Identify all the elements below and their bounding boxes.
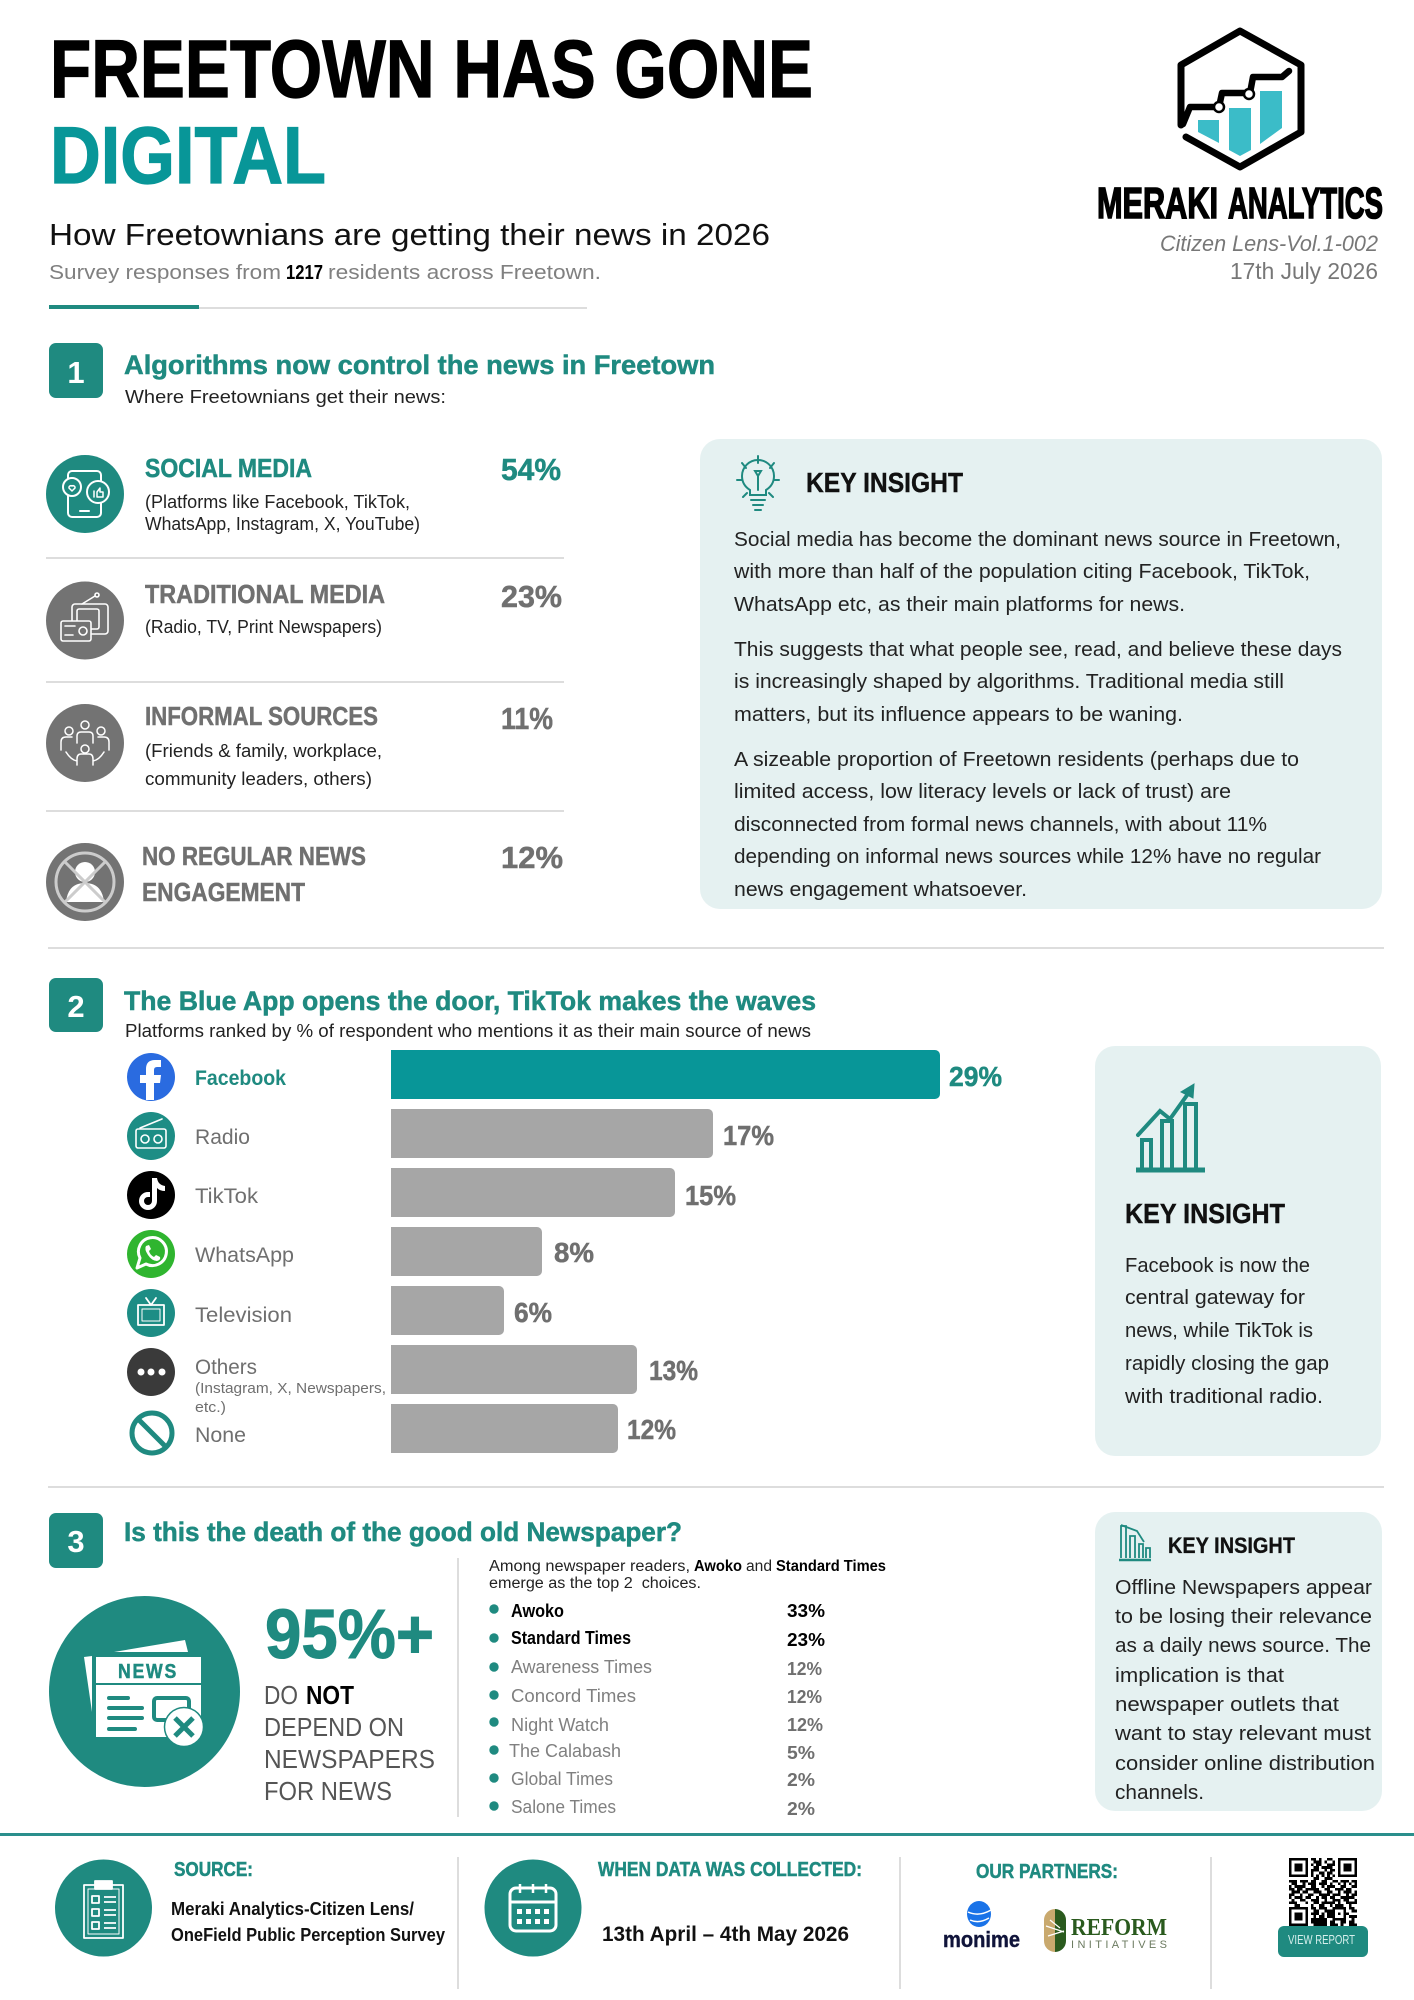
section 2 heading: The Blue App opens the door, TikTok makes the waves <box>124 986 816 1016</box>
no regular news row: NO REGULAR NEWS <box>142 841 366 871</box>
bar values: 6% <box>514 1297 552 1328</box>
bar values <box>514 1061 1002 1445</box>
platform labels: Radio <box>195 1126 250 1149</box>
platform labels <box>195 1067 386 1447</box>
footer: data collection dates <box>484 1859 862 1956</box>
newspaper ranking list: Awareness Times <box>511 1657 652 1677</box>
informal sources row <box>46 701 553 789</box>
footer: partners <box>943 1861 1167 1952</box>
platform labels: Facebook <box>195 1067 286 1090</box>
report volume and date <box>1160 231 1378 284</box>
social media row: SOCIAL MEDIA <box>145 453 312 483</box>
traditional media row: 23% <box>501 579 562 614</box>
insight body text <box>1114 1577 1375 1804</box>
newspaper ranking list: 5% <box>787 1743 815 1763</box>
title: FREETOWN HAS GONE <box>50 24 813 115</box>
icon: light bulb <box>737 456 779 510</box>
footer: source: SOURCE: <box>174 1859 253 1881</box>
platform labels: (Instagram, X, Newspapers, <box>195 1380 386 1397</box>
newspaper ranking list: The Calabash <box>509 1741 621 1761</box>
insight body text: depending on informal news sources while 12% have no regular <box>734 846 1321 868</box>
newspaper ranking list: Standard Times <box>511 1628 631 1648</box>
insight body text: disconnected from formal news channels, with about 11% <box>734 814 1267 836</box>
section 1 heading: Where Freetownians get their news: <box>125 387 446 407</box>
no regular news row <box>46 840 563 921</box>
icon: newspaper with cross: NEWS <box>118 1661 178 1683</box>
icon: clipboard checklist <box>84 1881 123 1938</box>
insight body text: with traditional radio. <box>1124 1386 1323 1408</box>
newspaper ranking list: 2% <box>787 1770 815 1790</box>
bars <box>391 1050 940 1453</box>
insight body text: Social media has become the dominant news source in Freetown, <box>734 529 1341 551</box>
social media row: WhatsApp, Instagram, X, YouTube) <box>145 514 420 534</box>
newspaper intro text: and <box>746 1558 772 1575</box>
icon: facebook <box>127 1053 175 1101</box>
button: view report <box>1278 1926 1368 1957</box>
button: view report: VIEW REPORT <box>1288 1933 1355 1947</box>
panel: key insight 1: KEY INSIGHT <box>806 467 963 498</box>
panel: key insight 3 <box>1095 1512 1382 1811</box>
platform labels: None <box>195 1424 246 1447</box>
insight body text: channels. <box>1115 1782 1204 1804</box>
bar values: 17% <box>723 1120 774 1151</box>
panel: key insight 2: KEY INSIGHT <box>1125 1198 1285 1229</box>
newspaper intro text: Among newspaper readers, <box>489 1558 690 1575</box>
insight body text: central gateway for <box>1125 1287 1305 1309</box>
section 2 heading <box>49 978 816 1041</box>
insight body text: Facebook is now the <box>1125 1255 1310 1277</box>
footer: data collection dates: 13th April – 4th May 2026 <box>602 1923 849 1946</box>
section 1 heading: 1 <box>67 355 85 390</box>
informal sources row: 11% <box>501 701 553 736</box>
stat: 95%+: NOT <box>306 1680 354 1710</box>
logo: Meraki Analytics: MERAKI <box>1097 179 1218 228</box>
newspaper ranking list: Night Watch <box>511 1715 609 1735</box>
stat: 95%+: DEPEND ON <box>264 1712 404 1742</box>
icon: tiktok <box>127 1171 175 1219</box>
insight body text: newspaper outlets that <box>1115 1694 1339 1716</box>
stat: 95%+: NEWSPAPERS <box>264 1744 435 1774</box>
bar values: 13% <box>649 1355 698 1386</box>
icon: calendar <box>510 1884 556 1931</box>
informal sources row: (Friends & family, workplace, <box>145 741 382 761</box>
insight body text: This suggests that what people see, read, and believe these days <box>734 639 1342 661</box>
newspaper ranking list: Salone Times <box>511 1797 616 1817</box>
report volume and date: 17th July 2026 <box>1230 258 1378 284</box>
stat: 95%+: 95%+ <box>265 1595 434 1673</box>
icon: group of people <box>61 721 109 765</box>
newspaper ranking list: 12% <box>787 1687 822 1707</box>
survey note: residents across Freetown. <box>328 262 601 284</box>
no regular news row: 12% <box>501 840 563 875</box>
informal sources row: community leaders, others) <box>145 769 372 789</box>
platform labels: Television <box>195 1304 292 1327</box>
icon: television <box>127 1289 175 1337</box>
section 1 heading: Algorithms now control the news in Freetown <box>124 350 715 380</box>
platform labels: WhatsApp <box>195 1244 294 1267</box>
survey note: 1217 <box>286 262 323 284</box>
bar values: 29% <box>949 1061 1002 1092</box>
footer: source <box>55 1859 445 1956</box>
traditional media row <box>46 579 562 660</box>
survey note: Survey responses from <box>49 262 281 284</box>
icon: phone with social bubbles <box>63 471 109 517</box>
insight body text: as a daily news source. The <box>1115 1635 1371 1657</box>
platform labels: Others <box>195 1356 257 1379</box>
newspaper intro text: Standard Times <box>776 1558 886 1575</box>
footer: source: OneField Public Perception Survey <box>171 1925 445 1945</box>
section 3 heading <box>49 1513 682 1568</box>
bar values: 12% <box>627 1414 676 1445</box>
section 3 heading: Is this the death of the good old Newspaper? <box>124 1517 682 1547</box>
newspaper ranking list: Global Times <box>511 1769 613 1789</box>
section 2 heading: Platforms ranked by % of respondent who mentions it as their main source of news <box>125 1021 811 1041</box>
newspaper ranking list: 23% <box>787 1630 825 1650</box>
newspaper intro text: emerge as the top 2 choices. <box>489 1575 701 1592</box>
icon: rising chart <box>1136 1084 1205 1170</box>
logo: reform initiatives: INITIATIVES <box>1071 1939 1167 1951</box>
panel: key insight 2 <box>1095 1046 1381 1456</box>
panel: news source categories <box>46 452 564 921</box>
insight body text: consider online distribution <box>1115 1753 1375 1775</box>
insight body text: news engagement whatsoever. <box>734 879 1027 901</box>
icon: crossed-out person <box>56 853 114 911</box>
insight body text: implication is that <box>1115 1665 1284 1687</box>
no regular news row: ENGAGEMENT <box>142 877 305 907</box>
insight body text: to be losing their relevance <box>1115 1606 1372 1628</box>
QR code <box>1289 1858 1357 1926</box>
subtitle: How Freetownians are getting their news in 2026 <box>49 217 770 252</box>
logo: reform initiatives: REFORM <box>1071 1915 1167 1941</box>
bar chart: platforms <box>127 1050 1002 1453</box>
section 2 heading: 2 <box>67 989 85 1024</box>
logo: Meraki Analytics <box>1097 31 1383 228</box>
newspaper ranking list <box>489 1601 825 1819</box>
traditional media row: (Radio, TV, Print Newspapers) <box>145 617 382 637</box>
section 3 heading: 3 <box>67 1524 85 1559</box>
logo: monime <box>943 1901 1020 1952</box>
newspaper intro text: Awoko <box>694 1558 742 1575</box>
icon: whatsapp <box>127 1230 175 1278</box>
panel: key insight 3: KEY INSIGHT <box>1168 1533 1295 1558</box>
footer: data collection dates: WHEN DATA WAS COLLECTED: <box>598 1859 862 1881</box>
icon: others <box>127 1348 175 1396</box>
newspaper ranking list: 12% <box>787 1659 822 1679</box>
newspaper ranking list: 33% <box>787 1601 825 1621</box>
insight body text <box>733 529 1342 901</box>
insight body text: news, while TikTok is <box>1125 1320 1313 1342</box>
stat: 95%+: DO <box>264 1680 298 1710</box>
social media row: (Platforms like Facebook, TikTok, <box>145 492 410 512</box>
icon: tv and radio <box>61 593 108 641</box>
insight body text: Offline Newspapers appear <box>1115 1577 1372 1599</box>
survey note <box>49 262 601 284</box>
platform labels: etc.) <box>195 1399 226 1416</box>
insight body text: A sizeable proportion of Freetown residents (perhaps due to <box>734 749 1299 771</box>
insight body text <box>1124 1255 1329 1408</box>
logo: reform initiatives <box>1044 1909 1167 1952</box>
insight body text: limited access, low literacy levels or lack of trust) are <box>734 781 1231 803</box>
bar values: 8% <box>554 1237 594 1268</box>
insight body text: with more than half of the population citing Facebook, TikTok, <box>733 561 1310 583</box>
newspaper ranking list: 2% <box>787 1799 815 1819</box>
section 1 heading <box>49 343 715 407</box>
stat: 95%+ <box>264 1595 435 1806</box>
insight body text: rapidly closing the gap <box>1125 1353 1329 1375</box>
panel: key insight 1 <box>700 439 1382 909</box>
insight body text: want to stay relevant must <box>1114 1723 1371 1745</box>
newspaper ranking list: Concord Times <box>511 1686 636 1706</box>
insight body text: matters, but its influence appears to be waning. <box>734 704 1183 726</box>
social media row <box>46 452 561 534</box>
insight body text: is increasingly shaped by algorithms. Traditional media still <box>734 671 1284 693</box>
report volume and date: Citizen Lens-Vol.1-002 <box>1160 231 1378 256</box>
platform labels: TikTok <box>195 1185 259 1208</box>
newspaper intro text <box>489 1558 886 1592</box>
icon: radio <box>127 1112 175 1160</box>
logo: monime: monime <box>943 1927 1020 1952</box>
traditional media row: TRADITIONAL MEDIA <box>145 579 385 609</box>
icon: falling chart <box>1119 1525 1151 1560</box>
title: DIGITAL <box>50 111 326 201</box>
title <box>50 24 813 201</box>
newspaper ranking list: 12% <box>787 1715 823 1735</box>
footer: source: Meraki Analytics-Citizen Lens/ <box>171 1899 414 1919</box>
informal sources row: INFORMAL SOURCES <box>145 701 378 731</box>
icon: none <box>132 1413 172 1453</box>
social media row: 54% <box>501 452 561 487</box>
stat: 95%+: FOR NEWS <box>264 1776 392 1806</box>
bar values: 15% <box>685 1180 736 1211</box>
footer: partners: OUR PARTNERS: <box>976 1861 1118 1883</box>
newspaper ranking list: Awoko <box>511 1601 564 1621</box>
insight body text: WhatsApp etc, as their main platforms for news. <box>734 594 1185 616</box>
icon: newspaper with cross <box>49 1596 240 1787</box>
